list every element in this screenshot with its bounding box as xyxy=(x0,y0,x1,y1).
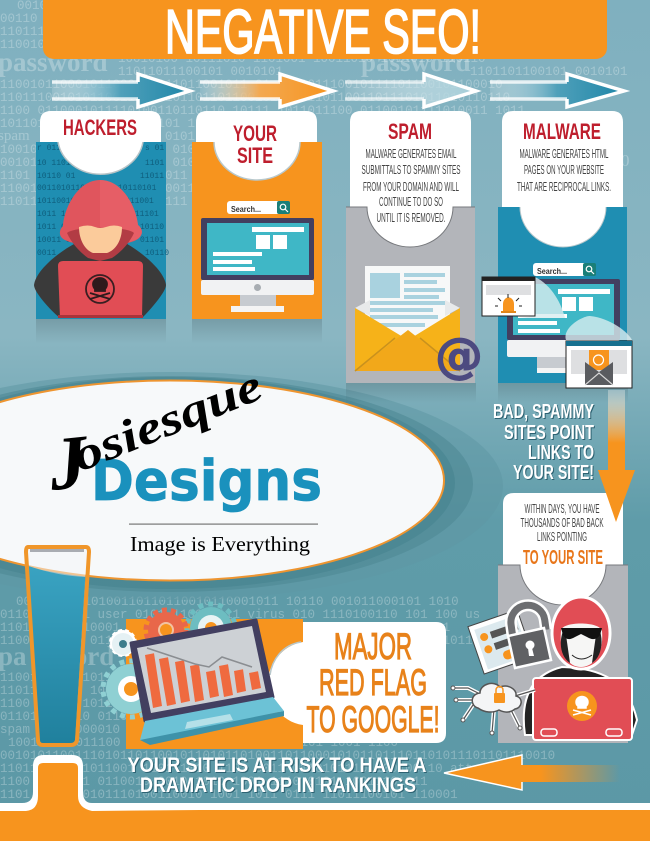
binary code pattern: 01101 011 10 0110 0111 1001 1010 1101 1100 xyxy=(0,710,315,724)
Designs logotype: Designs xyxy=(91,449,322,514)
laptop xyxy=(58,261,143,318)
icon: alert popup xyxy=(482,277,535,316)
icon: gears xyxy=(103,604,235,717)
panel: hackers: 10110 xyxy=(145,249,169,258)
body text: SUBMITTALS TO SPAMMY SITES xyxy=(362,163,460,177)
logo oval xyxy=(0,359,444,580)
binary code pattern: password xyxy=(361,47,471,77)
panel: hackers: 0011010110 01101 xyxy=(37,184,114,193)
binary code pattern: 1100 011000 011 1010 1011 0101 110 110 0101 0010 1110 0110 1011 xyxy=(0,634,473,648)
binary code pattern: password xyxy=(0,47,108,77)
panel: hackers: 011001 xyxy=(125,197,154,206)
panel: spam xyxy=(346,111,483,384)
binary code pattern: 1100 0110001011110100110110110 10111 1011011100 01100101111010011 1011 xyxy=(0,104,525,118)
body text xyxy=(517,147,611,194)
binary code pattern: 11001 11011 1010 0101 0011 001 0110 xyxy=(0,182,263,196)
panel: hackers: r 0110 xyxy=(37,144,66,153)
icon: hooded hacker xyxy=(34,180,166,318)
script logotype: osiesque xyxy=(65,359,269,481)
body text: UNTIL IT IS REMOVED. xyxy=(376,211,446,225)
binary code pattern: ck0 xyxy=(605,151,630,170)
panel: hackers: 10110 xyxy=(140,223,164,232)
binary code pattern: 110111 0010 1101101 00 1010 10110 0010110 xyxy=(0,25,308,39)
panel: hackers: 0011 xyxy=(37,249,56,258)
binary code pattern: 00101 110101 1001 0100 01011 1011 10010 xyxy=(0,156,293,170)
binary code pattern: 10010100 10111010 1101001 10011010 1011010 110110 xyxy=(118,52,486,66)
binary code pattern: 00101011001110101101100101101011010011011000101011011101101011101101110010 xyxy=(0,749,555,763)
binary code pattern: 11011100101011001101101011011011001011010110110011011101011010110110 xyxy=(0,91,510,105)
icon: envelope with at sign xyxy=(355,266,483,384)
arrow: back to google xyxy=(444,755,620,790)
binary code pattern: 00110001 10100110110110010110001011 10110 001011000101 1010 xyxy=(16,595,459,609)
panel: red flag: RED FLAG xyxy=(319,662,427,703)
icon: hacker with headset and laptop xyxy=(524,597,637,740)
body text: LINKS POINTING xyxy=(537,530,587,544)
script logotype xyxy=(44,359,269,507)
body text xyxy=(362,147,460,225)
body text: MALWARE GENERATES EMAIL xyxy=(366,147,457,161)
binary code pattern: 1101101100101 0010101 xyxy=(470,65,628,79)
icon: cloud lock circuit xyxy=(451,683,535,735)
binary code pattern: 1011011 11100 10010 1101 11010 1110 xyxy=(0,117,263,131)
heading: MALWARE xyxy=(523,119,601,144)
text: at risk: YOUR SITE IS AT RISK TO HAVE A xyxy=(128,754,426,777)
panel reflections xyxy=(36,319,628,403)
red laptop xyxy=(533,678,632,740)
binary code pattern: 1101 10 0000101110100110010 1001 1011 0111 11011100101 110001 xyxy=(0,788,458,802)
text: bad spammy sites xyxy=(493,401,594,484)
icon: laptop chart xyxy=(131,620,284,745)
white tab xyxy=(350,111,471,247)
panel: red flag xyxy=(103,604,446,749)
white callout xyxy=(268,622,446,743)
panel: hackers: 10011 0 xyxy=(37,236,71,245)
decorative rings around oval xyxy=(0,372,503,600)
binary code pattern: 1100 11001 1011 1110 0111 1010 1011 0110 0101 xyxy=(0,697,338,711)
panel: hackers: 1011 0101 01101 xyxy=(37,223,109,232)
binary code pattern: 11011 10 011011001 1101 1010 1101 0011 01101011101100100110 attack xyxy=(0,762,495,776)
panel: hackers: 10 1101 xyxy=(37,159,71,168)
binary code pattern: pa ssword xyxy=(0,641,114,671)
search bar: Search... xyxy=(537,266,567,276)
white tab xyxy=(503,493,623,605)
binary code pattern: spam 101 1000010 110 1001 1100 0111 0101 xyxy=(0,723,300,737)
panel: hackers: 01101 xyxy=(140,236,164,245)
white tab xyxy=(40,111,161,174)
arrow: spam to malware xyxy=(345,74,476,107)
binary code pattern: 110010110001011000101111011001011 01 100101110010111101100101100010 xyxy=(0,78,503,92)
panel: your site: SITE xyxy=(237,143,273,168)
panel: malware xyxy=(482,111,632,388)
icon: malware email popup xyxy=(566,341,632,388)
binary code pattern: 1100 101 101 0110010 0010 1010 1001 1110 0101 10011101011 xyxy=(0,775,428,789)
title banner xyxy=(43,0,607,67)
search bar xyxy=(227,201,290,214)
tagline: Image is Everything xyxy=(130,532,311,556)
panel: your site xyxy=(192,111,322,319)
heading: HACKERS xyxy=(63,115,137,140)
text: bad spammy sites: LINKS TO xyxy=(528,442,594,464)
icon: monitor xyxy=(201,218,314,312)
icon: monitor xyxy=(507,277,632,373)
skull badge xyxy=(86,275,114,303)
text: bad spammy sites: BAD, SPAMMY xyxy=(493,401,594,423)
text: bad spammy sites: SITES POINT xyxy=(504,422,594,444)
heading: MAJOR xyxy=(334,626,412,667)
panel: hackers: 10110 01 xyxy=(37,172,76,181)
binary code pattern: 11011 00101 1000 1011 1101 1101 0111 1001 1010 xyxy=(0,684,345,698)
panel: hackers: 11011 xyxy=(140,172,164,181)
binary code pattern: 1100101100 1011 0111 0101 1001 0110 0011 0101 0110 xyxy=(0,671,375,685)
binary code pattern: 10010 100101 1011 1011 01011 1010 0010 xyxy=(0,143,285,157)
binary code pattern: 1101 10010 1100 1100 1011 0101 1110 xyxy=(0,169,263,183)
panel: back links xyxy=(451,493,637,743)
body text: FROM YOUR DOMAIN AND WILL xyxy=(363,180,459,194)
binary code pattern: 11011 1101 1001 0110 0111 1010 1110 xyxy=(0,195,263,209)
binary code pattern: 110010 1011 0001101 110 101 0110 10001 xyxy=(0,38,285,52)
panel: hackers xyxy=(34,111,169,319)
title: NEGATIVE SEO! xyxy=(165,0,481,67)
binary code pattern: 1101 10 10 10001 01 10 11 110 101 1001 0010 1100 10 110 0001 xyxy=(0,621,450,635)
search bar: Search... xyxy=(231,204,261,214)
panel: hackers: 1101 xyxy=(145,159,164,168)
arrow: site to spam xyxy=(200,74,333,107)
panel: hackers: s 01 xyxy=(145,144,164,153)
panel: hackers: 1011 1011 10110 xyxy=(37,210,109,219)
panel: hackers: 10110010 1010 01 xyxy=(37,197,114,206)
script logotype: J xyxy=(44,419,94,507)
arrow: down to back links xyxy=(598,390,635,522)
binary code pattern: 0110 101 101 user 0101 1100 0111 virus 010 1110100110 101 100 us xyxy=(0,608,480,622)
text: bad spammy sites: YOUR SITE! xyxy=(513,462,594,484)
icon: login window xyxy=(468,610,533,674)
footer band with exclamation dot xyxy=(0,755,650,841)
icon: padlock xyxy=(508,603,551,668)
arrow: hackers to site xyxy=(52,74,190,107)
text: at risk xyxy=(128,754,426,797)
panel: hackers: 10110101 xyxy=(118,184,157,193)
heading: YOUR xyxy=(233,121,277,146)
icon: exclamation glass xyxy=(24,545,91,747)
white tab xyxy=(196,111,317,180)
panel: hackers: 011101 xyxy=(130,210,159,219)
body text: CONTINUE TO DO SO xyxy=(379,195,443,209)
heading: SPAM xyxy=(388,119,432,144)
icon: envelope with at sign: @ xyxy=(435,328,483,384)
body text xyxy=(520,502,604,544)
binary code pattern: 11011011100101 0010101 xyxy=(118,65,283,79)
white tab xyxy=(502,111,623,247)
binary code pattern: 00110 1 101101 110 0011 1101001 10 110100 xyxy=(0,12,308,26)
panel: red flag: TO GOOGLE! xyxy=(306,699,440,740)
search bar xyxy=(533,263,596,276)
arrow: malware onward xyxy=(490,74,624,107)
binary code pattern: 10 10110 1011 0101 0111 10 0110 xyxy=(60,130,293,144)
binary code pattern: 1001 10 1011100 1001 1010 0110 1101 100101 1001 1100 xyxy=(8,736,398,750)
text: at risk: DRAMATIC DROP IN RANKINGS xyxy=(140,774,416,797)
